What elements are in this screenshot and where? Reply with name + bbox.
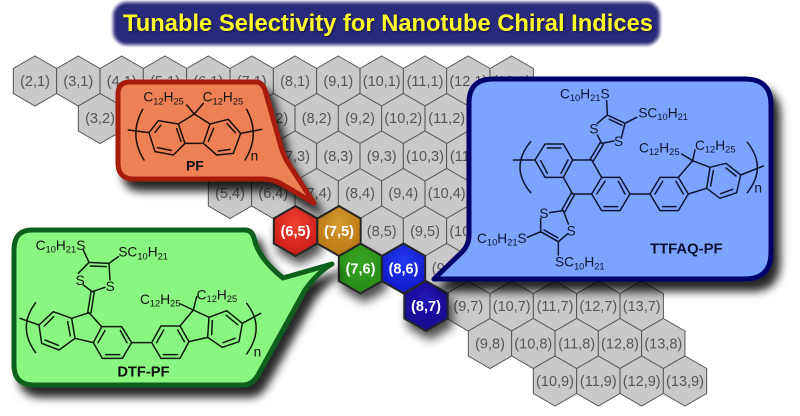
PF molecule structure: 25 xyxy=(173,96,184,106)
grey hexagon chirality grid: (11,8) xyxy=(558,336,595,352)
DTF-PF molecule structure: H xyxy=(217,287,227,302)
grey hexagon chirality grid: (10,7) xyxy=(493,299,531,315)
PF molecule structure: H xyxy=(164,90,173,105)
TTFAQ-PF molecule structure: SC xyxy=(555,255,574,270)
grey hexagon chirality grid: (13,8) xyxy=(644,336,682,352)
DTF-PF molecule structure: C xyxy=(36,238,46,253)
DTF-PF molecule structure xyxy=(20,238,261,380)
grey hexagon chirality grid: (9,3) xyxy=(367,149,397,165)
title banner: Tunable Selectivity for Nanotube Chiral Indices xyxy=(124,11,654,38)
TTFAQ-PF molecule structure: 21 xyxy=(678,112,688,122)
title banner: Tunable Selectivity for Nanotube Chiral Indices xyxy=(123,10,653,37)
TTFAQ-PF molecule structure: 21 xyxy=(594,261,605,271)
grey hexagon chirality grid: (9,2) xyxy=(345,111,375,127)
grey hexagon chirality grid: (13,7) xyxy=(623,299,661,315)
TTFAQ-PF molecule structure: C xyxy=(477,231,487,246)
PF molecule structure: 12 xyxy=(213,96,223,106)
TTFAQ-PF molecule structure: 21 xyxy=(507,238,518,248)
PF molecule structure: n xyxy=(251,149,258,164)
grey hexagon chirality grid: (10,2) xyxy=(384,111,422,127)
grey hexagon chirality grid: (11,1) xyxy=(407,74,443,90)
TTFAQ-PF molecule structure: C xyxy=(560,86,570,101)
TTFAQ-PF molecule structure: H xyxy=(580,86,590,101)
TTFAQ-PF molecule structure: 25 xyxy=(725,145,736,155)
orange speech bubble xyxy=(118,82,314,203)
TTFAQ-PF molecule structure: 21 xyxy=(590,93,601,103)
PF molecule structure: 25 xyxy=(233,96,243,106)
DTF-PF molecule structure: H xyxy=(56,238,66,253)
hexagon (7,5): (7,5) xyxy=(324,224,354,240)
DTF-PF molecule structure: 12 xyxy=(150,299,160,309)
hexagon (7,6): (7,6) xyxy=(346,262,376,278)
DTF-PF molecule structure: S xyxy=(76,273,85,288)
DTF-PF molecule structure: SC xyxy=(118,245,137,260)
TTFAQ-PF molecule structure: 10 xyxy=(574,261,584,271)
grey hexagon chirality grid: (11,2) xyxy=(428,111,465,127)
TTFAQ-PF molecule structure: H xyxy=(659,140,669,155)
PF molecule structure: PF xyxy=(186,157,204,173)
blue speech bubble xyxy=(434,79,771,279)
hexagon (7,5) xyxy=(317,206,361,256)
DTF-PF molecule structure: 12 xyxy=(207,294,217,304)
grey hexagon chirality grid: (9,5) xyxy=(410,224,440,240)
grey hexagon chirality grid: (7,2) xyxy=(258,111,288,127)
grey hexagon chirality grid: (10,4) xyxy=(428,186,466,202)
TTFAQ-PF molecule structure: 10 xyxy=(657,112,668,122)
grey hexagon chirality grid: (8,5) xyxy=(367,224,397,240)
grey hexagon chirality grid: (12,1) xyxy=(449,74,487,90)
TTFAQ-PF molecule structure: 25 xyxy=(669,147,680,157)
PF molecule structure: 12 xyxy=(153,96,164,106)
grey hexagon chirality grid: (9,1) xyxy=(323,74,353,90)
grey hexagon chirality grid: (9,6) xyxy=(432,261,462,277)
TTFAQ-PF molecule structure: S xyxy=(567,223,576,238)
TTFAQ-PF molecule structure: C xyxy=(695,138,705,153)
grey hexagon chirality grid: (10,9) xyxy=(536,374,574,390)
DTF-PF molecule structure: DTF-PF xyxy=(117,364,169,380)
grey hexagon chirality grid: (12,8) xyxy=(601,336,639,352)
title banner xyxy=(113,2,660,45)
TTFAQ-PF molecule structure: H xyxy=(584,255,594,270)
TTFAQ-PF molecule structure: H xyxy=(497,231,507,246)
hexagon (6,5) xyxy=(274,206,317,256)
TTFAQ-PF molecule structure: S xyxy=(614,134,623,149)
hexagon (6,5): (6,5) xyxy=(281,224,311,240)
TTFAQ-PF molecule structure: S xyxy=(601,86,610,101)
TTFAQ-PF molecule structure: 10 xyxy=(570,93,580,103)
grey hexagon chirality grid: (11,9) xyxy=(580,374,617,390)
hexagon (8,7): (8,7) xyxy=(411,299,441,315)
grey hexagon chirality grid: (11,7) xyxy=(537,299,573,315)
grey hexagon chirality grid: (5,1) xyxy=(150,74,180,90)
grey hexagon chirality grid: (6,4) xyxy=(258,186,288,202)
grey hexagon chirality grid: (11,3) xyxy=(450,149,487,165)
grey hexagon chirality grid: (7,1) xyxy=(237,74,267,90)
DTF-PF molecule structure: H xyxy=(148,245,158,260)
grey hexagon chirality grid: (8,3) xyxy=(323,149,353,165)
grey hexagon chirality grid: (7,4) xyxy=(302,186,332,202)
DTF-PF molecule structure: 21 xyxy=(158,251,168,261)
grey hexagon chirality grid: (13,9) xyxy=(666,374,704,390)
TTFAQ-PF molecule structure: SC xyxy=(638,105,657,120)
green speech bubble xyxy=(14,230,332,385)
TTFAQ-PF molecule structure: H xyxy=(668,105,678,120)
DTF-PF molecule structure: C xyxy=(197,287,207,302)
DTF-PF molecule structure: S xyxy=(76,238,85,253)
PF molecule structure: C xyxy=(143,90,153,105)
TTFAQ-PF molecule structure: TTFAQ-PF xyxy=(650,241,723,257)
DTF-PF molecule structure: 21 xyxy=(66,245,76,255)
grey hexagon chirality grid: (10,3) xyxy=(406,149,444,165)
panel: TTFAQ-PF callout xyxy=(434,79,771,279)
DTF-PF molecule structure: 25 xyxy=(170,299,181,309)
TTFAQ-PF molecule structure: S xyxy=(539,206,548,221)
grey hexagon chirality grid: (9,7) xyxy=(453,299,483,315)
grey hexagon chirality grid: (10,1) xyxy=(363,74,401,90)
panel: DTF-PF callout xyxy=(14,230,332,385)
TTFAQ-PF molecule structure xyxy=(477,86,763,271)
DTF-PF molecule structure: 10 xyxy=(46,245,56,255)
DTF-PF molecule structure: n xyxy=(254,345,261,360)
highlighted hexagons xyxy=(274,206,448,331)
TTFAQ-PF molecule structure: 10 xyxy=(487,238,497,248)
DTF-PF molecule structure: C xyxy=(140,292,150,307)
DTF-PF molecule structure: S xyxy=(106,279,115,294)
grey hexagon chirality grid: (8,4) xyxy=(345,186,375,202)
TTFAQ-PF molecule structure: n xyxy=(754,180,762,195)
PF molecule structure: H xyxy=(223,90,233,105)
hexagon (7,6) xyxy=(339,244,382,294)
grey hexagon chirality grid: (9,8) xyxy=(475,336,505,352)
grey hexagon chirality grid: (9,4) xyxy=(388,186,418,202)
grey hexagon chirality grid: (6,1) xyxy=(193,74,223,90)
grey hexagon chirality grid: (10,8) xyxy=(514,336,552,352)
grey hexagon chirality grid: (3,2) xyxy=(85,111,115,127)
grey hexagon chirality grid: (8,1) xyxy=(280,74,310,90)
hexagon (8,6): (8,6) xyxy=(389,262,419,278)
TTFAQ-PF molecule structure: 12 xyxy=(649,147,659,157)
TTFAQ-PF molecule structure: C xyxy=(639,140,649,155)
grey hexagon chirality grid: (12,9) xyxy=(623,374,661,390)
TTFAQ-PF molecule structure: H xyxy=(715,138,725,153)
grey hexagon chirality grid: (5,4) xyxy=(215,186,245,202)
DTF-PF molecule structure: H xyxy=(160,292,170,307)
DTF-PF molecule structure: 10 xyxy=(137,251,148,261)
grey hexagon chirality grid xyxy=(13,56,707,406)
PF molecule structure: C xyxy=(203,90,213,105)
grey hexagon chirality grid: (4,1) xyxy=(107,74,137,90)
DTF-PF molecule structure: 25 xyxy=(227,294,237,304)
grey hexagon chirality grid: (2,1) xyxy=(20,74,50,90)
TTFAQ-PF molecule structure: S xyxy=(518,231,527,246)
TTFAQ-PF molecule structure: 12 xyxy=(705,145,715,155)
grey hexagon chirality grid: (3,1) xyxy=(63,74,93,90)
grey hexagon chirality grid: (10,5) xyxy=(449,224,487,240)
grey hexagon chirality grid: (12,7) xyxy=(579,299,617,315)
hexagon (8,6) xyxy=(382,244,425,294)
hexagon (8,7) xyxy=(404,281,448,331)
panel: PF callout xyxy=(118,82,314,203)
grey hexagon chirality grid: (13,1) xyxy=(493,74,531,90)
TTFAQ-PF molecule structure: S xyxy=(589,121,598,136)
PF molecule structure xyxy=(128,90,262,173)
grey hexagon chirality grid: (7,3) xyxy=(280,149,310,165)
grey hexagon chirality grid: (8,2) xyxy=(302,111,332,127)
